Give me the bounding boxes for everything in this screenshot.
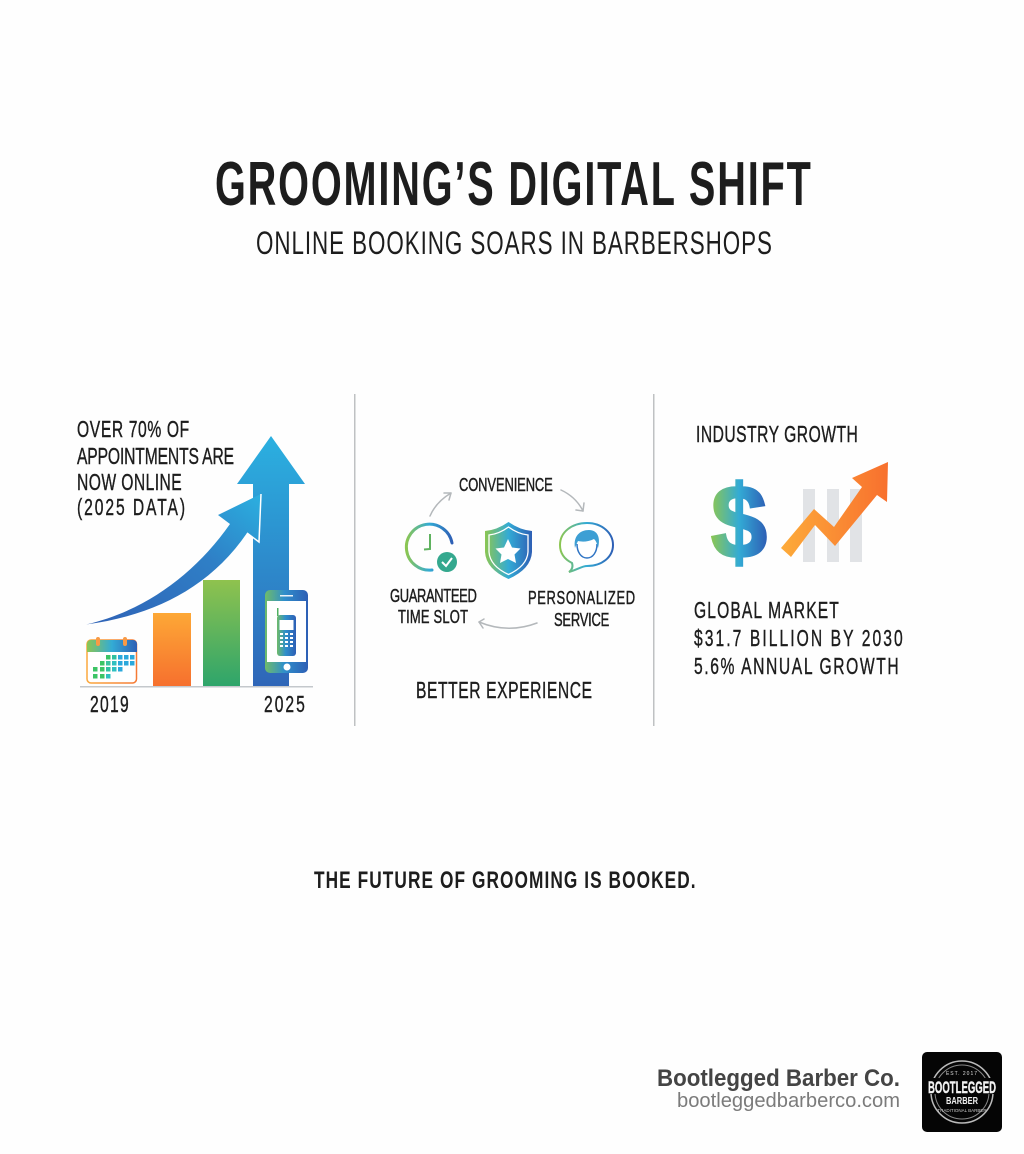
- icon: grey bars: [803, 489, 862, 562]
- label: personalized service: SERVICE: [554, 611, 609, 631]
- icon: shield with star: [485, 522, 532, 579]
- label: guaranteed time slot: TIME SLOT: [398, 608, 468, 628]
- icon: clock with check: [406, 524, 457, 572]
- label: personalized service: PERSONALIZED: [528, 589, 635, 609]
- market statistics: GLOBAL MARKET: [694, 598, 839, 624]
- chart baseline: [80, 686, 313, 688]
- icon: smartphone: [265, 590, 308, 673]
- callout: over 70% online: [77, 417, 234, 521]
- label: 2019: 2019: [90, 692, 129, 718]
- label: guaranteed time slot: [390, 587, 477, 628]
- brand url: bootleggedbarberco.com: [677, 1090, 900, 1112]
- label: personalized service: [528, 589, 635, 631]
- callout: over 70% online: OVER 70% OF: [77, 417, 189, 443]
- arrow: clock to convenience: [430, 493, 451, 516]
- brand name: Bootlegged Barber Co.: [657, 1065, 900, 1092]
- label: convenience: CONVENIENCE: [459, 476, 553, 496]
- green bar: [203, 580, 240, 686]
- arrow: service to time slot: [479, 619, 537, 628]
- divider left: [354, 394, 356, 726]
- logo badge: BARBER: [946, 1096, 979, 1107]
- arrow: convenience to service: [561, 490, 584, 511]
- arrowhead highlight: [247, 494, 261, 542]
- orange bar: [153, 613, 191, 686]
- logo badge: EST. 2017: [946, 1071, 978, 1077]
- logo badge: [922, 1052, 1002, 1132]
- heading: industry growth: INDUSTRY GROWTH: [696, 422, 858, 448]
- market statistics: $31.7 BILLION BY 2030: [694, 626, 903, 652]
- icon: dollar sign: $: [711, 465, 767, 581]
- panel: better experience: [390, 476, 635, 704]
- big upward arrow: [237, 436, 305, 686]
- label: 2025: 2025: [264, 692, 305, 718]
- panel: online appointments: [77, 417, 313, 718]
- callout: over 70% online: APPOINTMENTS ARE: [77, 444, 234, 470]
- label: guaranteed time slot: GUARANTEED: [390, 587, 477, 607]
- icon: rising orange arrow: [781, 462, 888, 557]
- heading: better experience: BETTER EXPERIENCE: [416, 678, 592, 704]
- title: GROOMING’S DIGITAL SHIFT: [215, 150, 811, 219]
- divider right: [653, 394, 654, 726]
- callout: over 70% online: (2025 DATA): [77, 495, 185, 521]
- market statistics: 5.6% ANNUAL GROWTH: [694, 654, 899, 680]
- icon: calendar: [87, 637, 137, 683]
- tagline: THE FUTURE OF GROOMING IS BOOKED.: [314, 867, 696, 894]
- callout: over 70% online: NOW ONLINE: [77, 470, 182, 496]
- panel: industry growth: [694, 422, 903, 680]
- market statistics: [694, 598, 903, 680]
- subtitle: ONLINE BOOKING SOARS IN BARBERSHOPS: [256, 225, 772, 261]
- curved growth arrow: [86, 494, 261, 624]
- icon: chat bubble with face: [560, 523, 613, 572]
- logo badge: TRADITIONAL BARBER: [937, 1108, 987, 1113]
